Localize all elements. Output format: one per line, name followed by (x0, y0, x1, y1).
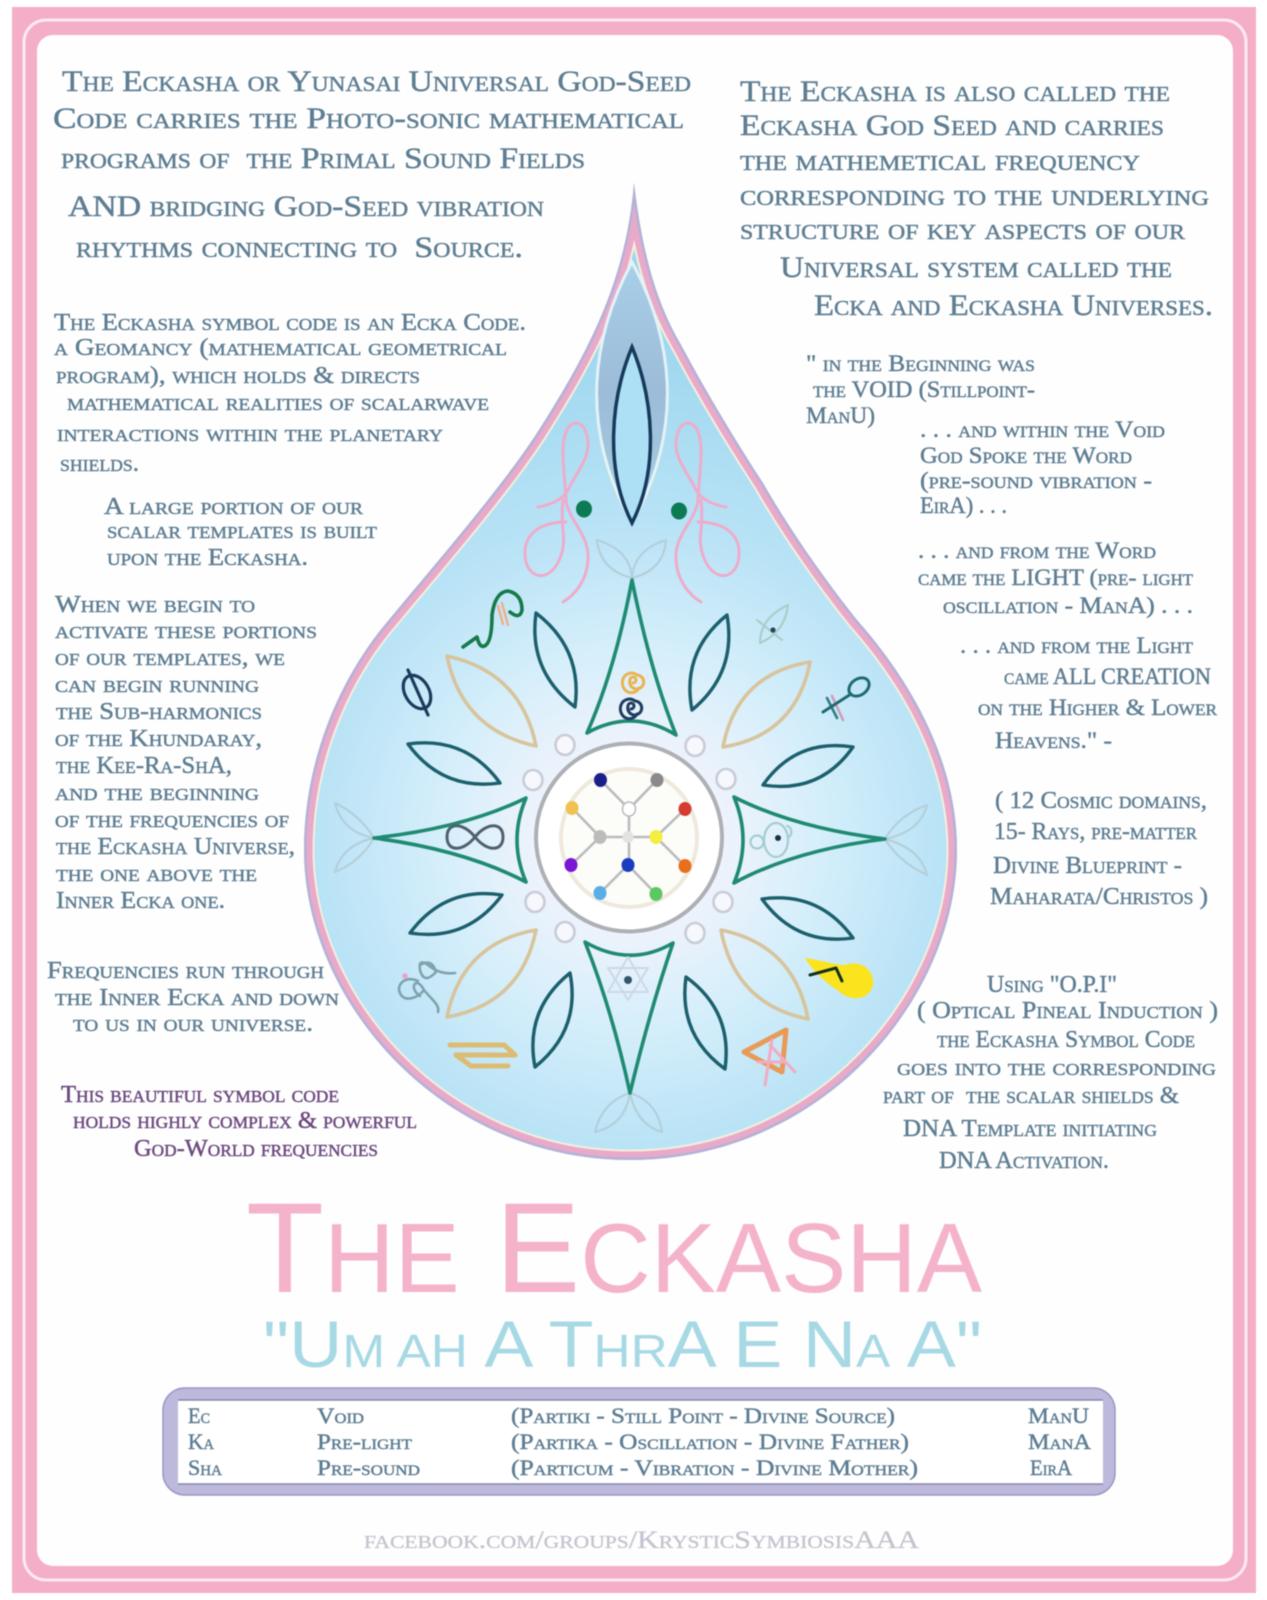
footer url: facebook.com/groups/KrysticSymbiosisAAA (364, 1527, 919, 1554)
text block: in the beginning quote: Heavens." - (995, 728, 1112, 753)
small ring circles (524, 735, 736, 943)
text block: optical pineal induction: part of the scalar shields & (883, 1083, 1179, 1109)
icon: eye leaf (757, 605, 788, 643)
text block: Ecka code explanation: shields. (60, 451, 139, 477)
text block: Ecka code explanation: a Geomancy (mathematical geometrical (54, 335, 507, 361)
flame lens (597, 262, 667, 523)
text block: optical pineal induction: goes into the corresponding (897, 1055, 1216, 1081)
text block: optical pineal induction: ( Optical Pineal Induction ) (917, 998, 1218, 1024)
text block: cosmic domains: 15- Rays, pre-matter (994, 819, 1198, 845)
text block: activating templates: the one above the (56, 861, 257, 887)
text block: activating templates: the Kee-Ra-ShA, (56, 753, 232, 779)
text block: activating templates: When we begin to (55, 592, 255, 618)
row: Sha (188, 1455, 1072, 1480)
text block: Ecka code explanation: The Eckasha symbol code is an Ecka Code. (54, 310, 526, 336)
teal leaves (408, 613, 853, 1069)
drop symbol (290, 170, 970, 1170)
text block: scalar templates: scalar templates is built (107, 518, 378, 544)
text block: top right description: Eckasha God Seed and carries (740, 109, 1164, 142)
text block: frequencies: the Inner Ecka and down (55, 985, 339, 1011)
text block: activating templates: of the Khundaray, (55, 726, 262, 752)
row: Ka (188, 1429, 1091, 1454)
icon: green snake (463, 591, 522, 647)
pink ribbons (525, 423, 739, 602)
title: THE ECKASHA (246, 1177, 983, 1320)
icon: om curl (399, 962, 455, 1012)
text block: top right description: structure of key aspects of our (740, 213, 1185, 246)
text block: in the beginning quote: . . . and within the Void (920, 417, 1165, 442)
text block: top right description (740, 75, 1213, 322)
icon: phi (398, 670, 436, 715)
text block: activating templates: the Eckasha Universe, (56, 834, 295, 860)
text block: Ecka code explanation (54, 310, 526, 477)
row: Ec: Void (317, 1403, 364, 1428)
text block: in the beginning quote: (pre-sound vibration - (920, 468, 1152, 493)
icon: spirals (620, 673, 644, 719)
subtitle: "UM AH A T HRA E N A A" (263, 1307, 982, 1381)
text block: optical pineal induction: DNA Template initiating (903, 1116, 1157, 1142)
row: Ka: ManA (1028, 1429, 1091, 1454)
icon: infinity (447, 826, 503, 848)
icon: yellow comet (805, 958, 873, 998)
text block: top left introduction: programs of the Primal Sound Fields (61, 142, 585, 175)
text block: scalar templates: A large portion of our (104, 494, 364, 520)
green triangles (374, 580, 885, 1093)
green dots (576, 500, 687, 520)
text block: in the beginning quote: . . . and from the Word (918, 538, 1156, 563)
text block: activating templates: can begin running (55, 672, 259, 698)
row: Ec (188, 1403, 1089, 1428)
text block: optical pineal induction: the Eckasha Symbol Code (937, 1027, 1195, 1053)
text block: cosmic domains (990, 788, 1208, 910)
icon: orange triangle (744, 1030, 795, 1085)
text block: top right description: Ecka and Eckasha Universes. (814, 289, 1213, 322)
text block: in the beginning quote: EirA) . . . (920, 493, 1007, 518)
text block: activating templates: and the beginning (55, 780, 259, 806)
text block: scalar templates (104, 494, 378, 571)
text block: activating templates: activate these portions (55, 618, 317, 644)
text block: in the beginning quote: . . . and from the Light (960, 633, 1193, 658)
text block: optical pineal induction (883, 972, 1218, 1174)
text block: in the beginning quote: God Spoke the Word (920, 443, 1132, 468)
drop body and border (290, 170, 970, 1170)
text block: in the beginning quote: the VOID (Stillpoint- (813, 377, 1035, 402)
icon: tan zigzag (450, 1045, 515, 1066)
text block: in the beginning quote: oscillation - ManA) . . . (943, 593, 1193, 618)
row: Ka: Pre-light (317, 1429, 412, 1454)
icon: pale star (608, 957, 648, 1000)
text block: cosmic domains: ( 12 Cosmic domains, (995, 788, 1207, 814)
text block: top right description: The Eckasha is also called the (740, 75, 1170, 108)
text block: in the beginning quote (806, 351, 1217, 753)
row: Ec: Ec (188, 1403, 210, 1428)
text block: top right description: corresponding to the underlying (740, 179, 1209, 212)
row: Ec: (Partiki - Still Point - Divine Source) (511, 1403, 895, 1428)
text block: Ecka code explanation: interactions within the planetary (57, 421, 443, 447)
text block: top left introduction (53, 65, 691, 264)
row: Sha: EirA (1030, 1455, 1072, 1480)
row: Sha: Pre-sound (317, 1455, 420, 1480)
text block: purple note (61, 1082, 417, 1162)
text block: top right description: the mathemetical frequency (740, 144, 1140, 177)
text block: in the beginning quote: came the LIGHT (pre- light (918, 565, 1193, 590)
text block: in the beginning quote: on the Higher & Lower (978, 695, 1217, 720)
text block: Ecka code explanation: mathematical realities of scalarwave (67, 390, 489, 416)
text block: activating templates (55, 592, 317, 914)
text block: frequencies: Frequencies run through (47, 958, 324, 984)
tulip leaves (335, 540, 927, 1132)
text block: activating templates: the Sub-harmonics (56, 699, 262, 725)
text block: frequencies (47, 958, 339, 1037)
text block: purple note: God-World frequencies (134, 1136, 378, 1162)
row: Ka: (Partika - Oscillation - Divine Father) (511, 1429, 909, 1454)
text block: in the beginning quote: ManU) (806, 403, 875, 428)
text block: scalar templates: upon the Eckasha. (107, 545, 308, 571)
text block: purple note: holds highly complex & powerful (73, 1108, 417, 1134)
text block: top left introduction: Code carries the Photo-sonic mathematical (53, 102, 684, 135)
row: Sha: (Particum - Vibration - Divine Mother) (511, 1455, 918, 1480)
text block: top left introduction: The Eckasha or Yunasai Universal God-Seed (62, 65, 691, 98)
text block: activating templates: of the frequencies of (55, 807, 289, 833)
text block: activating templates: of our templates, we (55, 645, 285, 671)
text block: in the beginning quote: came ALL CREATION (1004, 664, 1211, 689)
text block: top right description: Universal system called the (780, 251, 1172, 284)
icon: ankh (823, 674, 873, 720)
icon: curled eye (750, 823, 791, 857)
text block: Ecka code explanation: program), which holds & directs (56, 363, 420, 389)
tan leaves (447, 656, 810, 1019)
row: Ka: Ka (188, 1429, 214, 1454)
central hub with coloured nodes (536, 744, 722, 932)
text block: activating templates: Inner Ecka one. (56, 888, 225, 914)
text block: top left introduction: AND bridging God-Seed vibration (68, 190, 544, 223)
text block: top left introduction: rhythms connecting to Source. (76, 231, 523, 264)
text block: optical pineal induction: Using "O.P.I" (987, 972, 1117, 998)
text block: purple note: This beautiful symbol code (61, 1082, 339, 1108)
row: Sha: Sha (188, 1455, 222, 1480)
text block: optical pineal induction: DNA Activation. (939, 1148, 1109, 1174)
key table (163, 1388, 1115, 1495)
text block: cosmic domains: Divine Blueprint - (993, 853, 1182, 879)
row: Ec: ManU (1028, 1403, 1089, 1428)
text block: frequencies: to us in our universe. (73, 1011, 313, 1037)
text block: in the beginning quote: " in the Beginning was (806, 351, 1035, 376)
text block: cosmic domains: Maharata/Christos ) (990, 884, 1208, 910)
